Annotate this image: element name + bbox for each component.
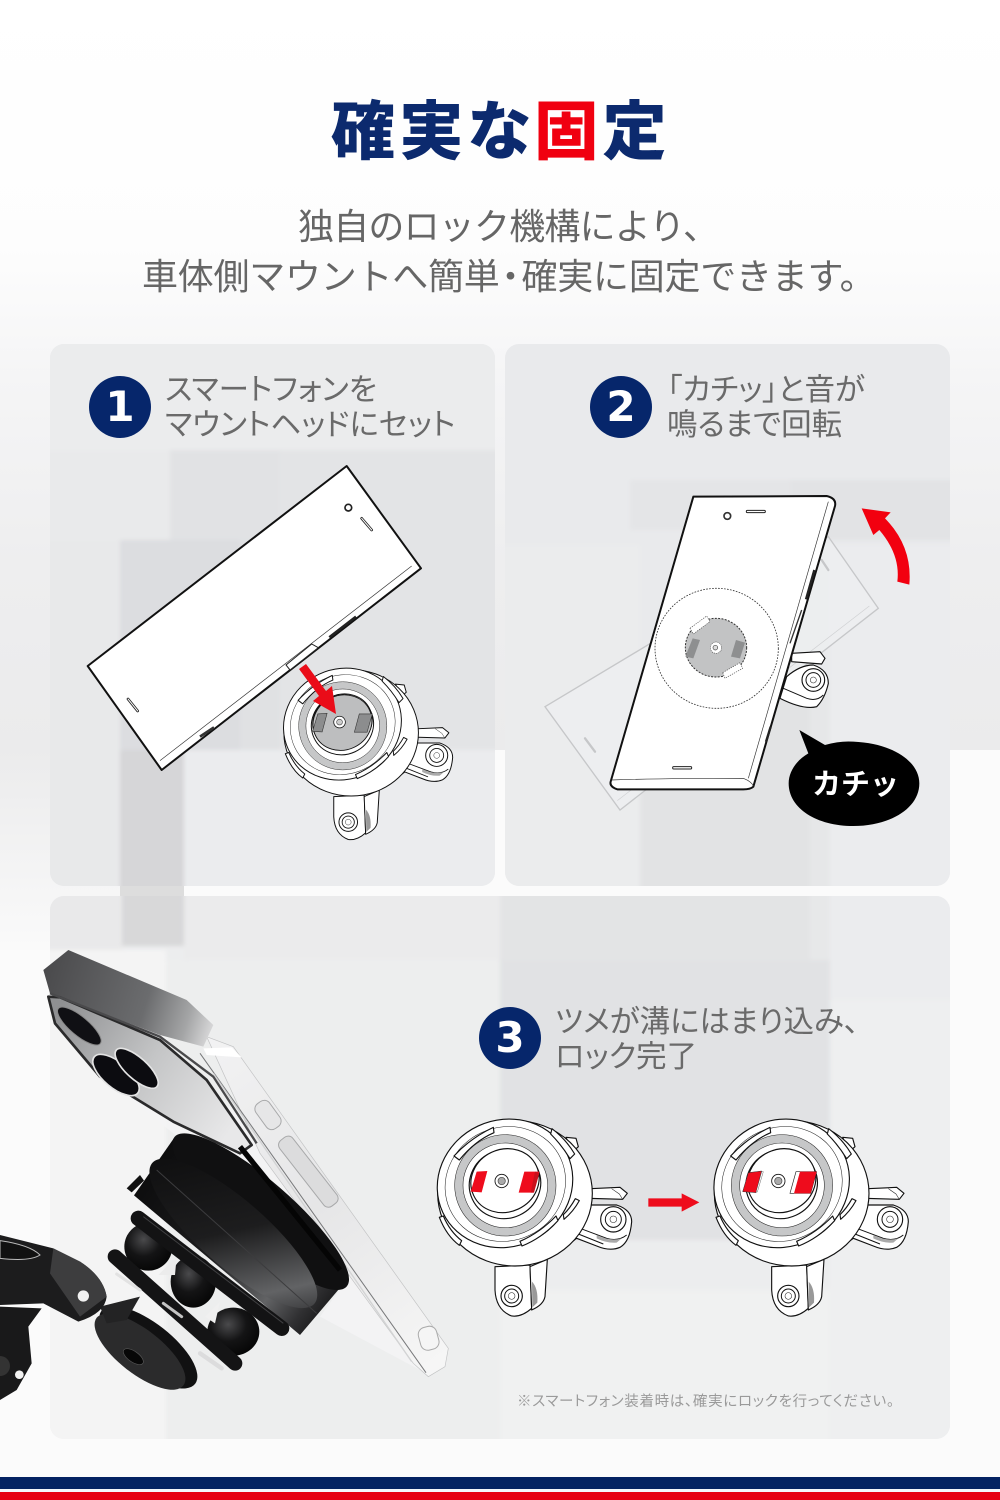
subtitle: 車体側マウントへ簡単・確実に固定できます。 xyxy=(142,256,875,297)
mount after locking xyxy=(693,1097,908,1316)
main phone xyxy=(610,496,835,789)
step 1 number badge xyxy=(89,376,151,438)
step 1 number badge: 1 xyxy=(105,382,135,431)
speech bubble xyxy=(789,730,919,826)
step 1 text: マウントヘッドにセット xyxy=(165,408,455,442)
arrow: rotate direction xyxy=(862,508,910,585)
step 2 text xyxy=(667,373,865,442)
step 3 text: ツメが溝にはまり込み、 xyxy=(555,1005,859,1039)
mount before locking xyxy=(416,1097,632,1316)
title: 確実な固定 xyxy=(331,96,671,168)
mount arm and base xyxy=(0,1235,210,1403)
panel: step 1 xyxy=(50,344,495,886)
step 3 number badge xyxy=(479,1007,541,1069)
step 3 text: ロック完了 xyxy=(555,1040,697,1074)
panel: step 2 xyxy=(505,344,950,886)
ghost phone start position xyxy=(545,537,878,810)
arrow: before to after xyxy=(648,1193,699,1212)
step 2 number badge: 2 xyxy=(606,382,636,431)
speech bubble text: カチッ xyxy=(812,769,899,801)
arrow: place phone xyxy=(299,664,336,714)
step 1 text: スマートフォンを xyxy=(165,373,377,407)
step 2 text: 鳴るまで回転 xyxy=(667,408,842,442)
mount arm behind phone xyxy=(780,652,828,707)
black mount disc xyxy=(127,1114,367,1335)
clear phone case xyxy=(43,950,448,1377)
step 3 number badge: 3 xyxy=(495,1013,525,1062)
step 1 text xyxy=(165,373,455,442)
step 3 text xyxy=(555,1005,859,1074)
step 2 text: 「カチッ」と音が xyxy=(667,373,865,407)
footnote: ※スマートフォン装着時は、確実にロックを行ってください。 xyxy=(517,1394,895,1410)
subtitle: 独自のロック機構により、 xyxy=(298,206,718,247)
ball joints xyxy=(124,1223,259,1356)
panel: step 3 xyxy=(50,896,950,1439)
step 2 number badge xyxy=(590,376,652,438)
subtitle xyxy=(142,206,875,297)
mount head xyxy=(265,649,453,840)
lower plate xyxy=(115,1257,235,1368)
phone xyxy=(88,466,421,770)
